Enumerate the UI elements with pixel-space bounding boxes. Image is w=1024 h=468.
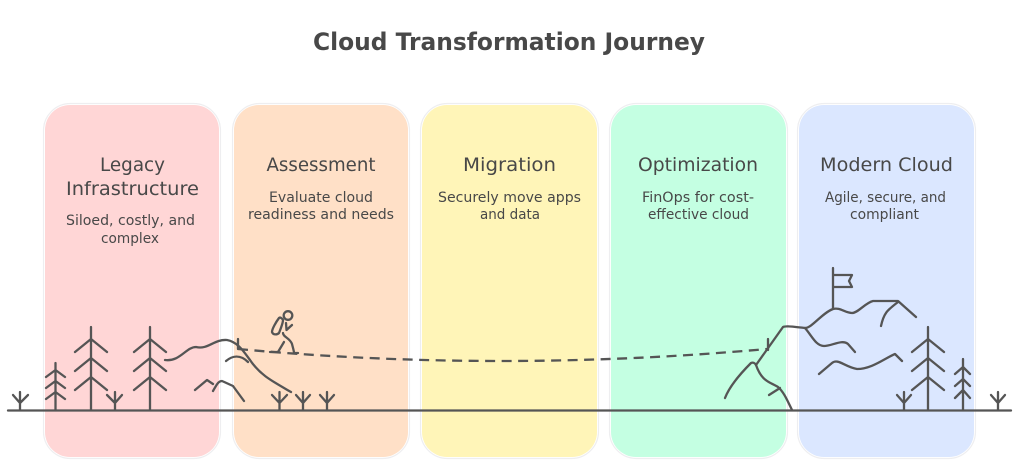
- heading: legacy infrastructure: Infrastructure: [66, 178, 199, 200]
- hiker icon: [270, 311, 298, 353]
- description: optimization: [642, 190, 754, 223]
- panel: assessment: [232, 104, 410, 458]
- heading: assessment: Assessment: [266, 154, 376, 176]
- description: modern cloud: [825, 190, 946, 223]
- description: legacy infrastructure: Siloed, costly, and: [66, 213, 195, 229]
- left forest: [13, 327, 166, 410]
- heading: modern cloud: Modern Cloud: [820, 154, 953, 176]
- description: assessment: Evaluate cloud: [269, 190, 373, 206]
- ground plants: [272, 392, 334, 410]
- title: Cloud Transformation Journey: [313, 28, 705, 56]
- heading: optimization: Optimization: [638, 154, 758, 176]
- heading: legacy infrastructure: [66, 154, 199, 200]
- left mountain: [165, 339, 291, 401]
- description: legacy infrastructure: complex: [101, 231, 159, 247]
- panel: legacy infrastructure: [44, 104, 220, 458]
- description: legacy infrastructure: [66, 213, 195, 247]
- description: optimization: effective cloud: [648, 207, 749, 223]
- description: assessment: readiness and needs: [248, 207, 394, 223]
- description: migration: and data: [480, 207, 540, 223]
- panel: migration: [420, 104, 598, 458]
- heading: legacy infrastructure: Legacy: [100, 154, 165, 176]
- panel: optimization: [610, 104, 788, 458]
- panel: modern cloud: [798, 104, 976, 458]
- right forest: [897, 327, 1005, 410]
- icon: summit flag: [833, 268, 852, 309]
- ground line: [8, 409, 1011, 412]
- description: optimization: FinOps for cost-: [642, 190, 754, 206]
- description: modern cloud: Agile, secure, and: [825, 190, 946, 206]
- description: assessment: [248, 190, 394, 223]
- summit mountain: [725, 301, 916, 410]
- heading: migration: Migration: [463, 154, 556, 176]
- description: modern cloud: compliant: [850, 207, 919, 223]
- description: migration: [438, 190, 581, 223]
- description: migration: Securely move apps: [438, 190, 581, 206]
- dashed journey path: [238, 349, 767, 361]
